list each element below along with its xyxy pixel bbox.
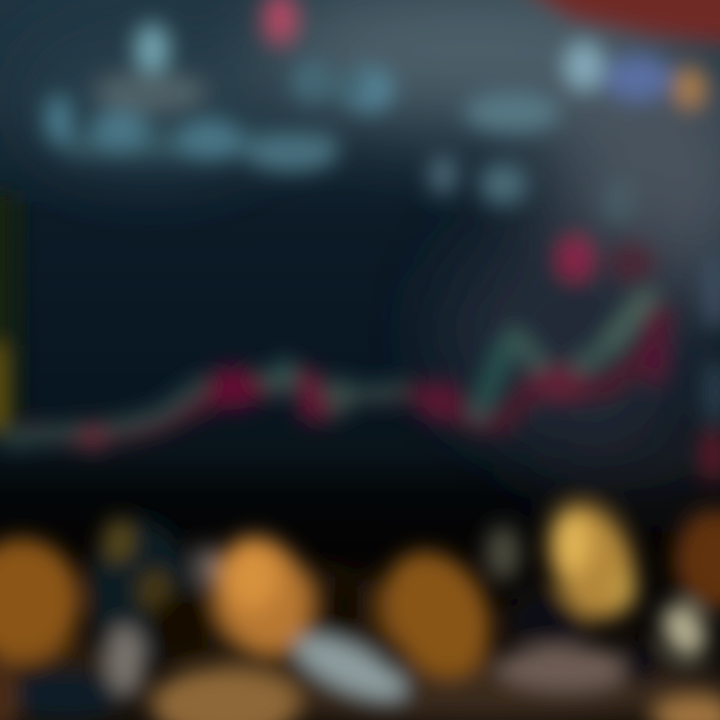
- dark coins: [7, 518, 590, 720]
- label: right text: [464, 93, 560, 133]
- label: top red dot: [263, 0, 297, 44]
- coin: silver bottom: [497, 646, 633, 690]
- chart: rising trace: [478, 295, 650, 415]
- left chart axis glow: [0, 190, 18, 440]
- red markers above chart: [558, 236, 720, 481]
- silver coins: [107, 596, 714, 712]
- label: left text line: [46, 96, 340, 172]
- label: upper left text: [94, 72, 206, 112]
- label: right edge haze: [702, 250, 720, 330]
- chart: green trace: [10, 375, 400, 440]
- chart: teal peaks: [280, 300, 645, 408]
- coin: right edge: [674, 510, 720, 610]
- coin: bottom left: [151, 667, 299, 720]
- dark gaps between coins: [332, 576, 660, 683]
- label: top teal dot: [137, 24, 167, 72]
- coins: [0, 491, 720, 720]
- chart: red trace: [30, 315, 665, 438]
- coin: silver left: [107, 626, 143, 694]
- coin: silver centre: [287, 624, 413, 712]
- red corner band: [480, 0, 720, 48]
- warm underlay: [0, 570, 720, 720]
- label: top right highlight: [565, 42, 705, 108]
- candlestick line chart: [10, 295, 669, 452]
- coin: bottom right: [653, 698, 720, 720]
- chart: red highlights: [81, 303, 669, 452]
- coin: silver right: [654, 596, 714, 664]
- label: small right text: [601, 178, 635, 222]
- coin: centre: [362, 532, 512, 696]
- gold coins: [0, 491, 720, 720]
- label: mid text: [428, 155, 527, 205]
- blurred screen labels: [46, 0, 720, 330]
- label: centre text: [292, 60, 394, 112]
- coin: bright right: [532, 491, 652, 633]
- coin: bottom left edge: [0, 660, 16, 720]
- background: grey screen glow: [30, 0, 720, 490]
- coin: left: [0, 538, 80, 662]
- coin: centre left: [198, 523, 324, 665]
